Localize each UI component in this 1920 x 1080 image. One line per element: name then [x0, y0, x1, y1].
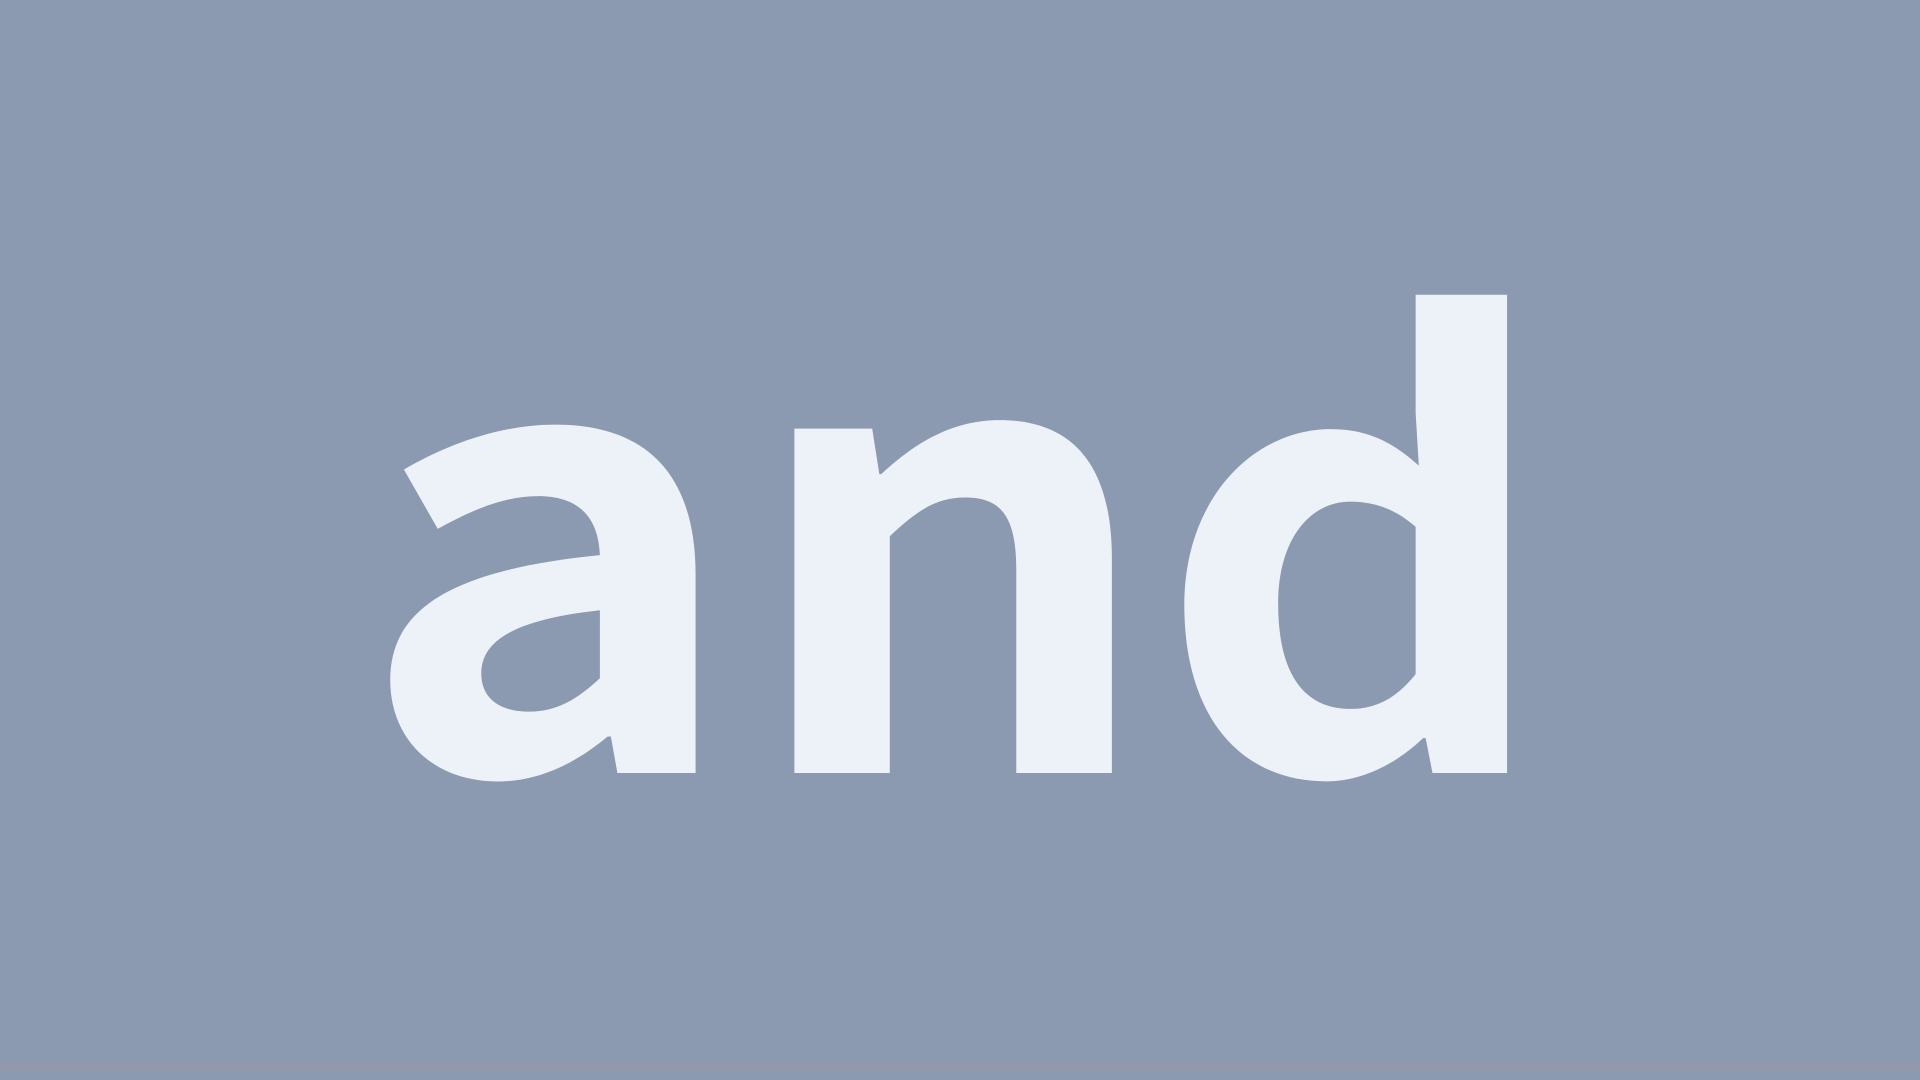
title word: and: [357, 61, 1556, 951]
title word: and: n: [743, 61, 1159, 951]
title word: and: a: [357, 70, 742, 949]
title word: and: d: [1155, 78, 1556, 946]
